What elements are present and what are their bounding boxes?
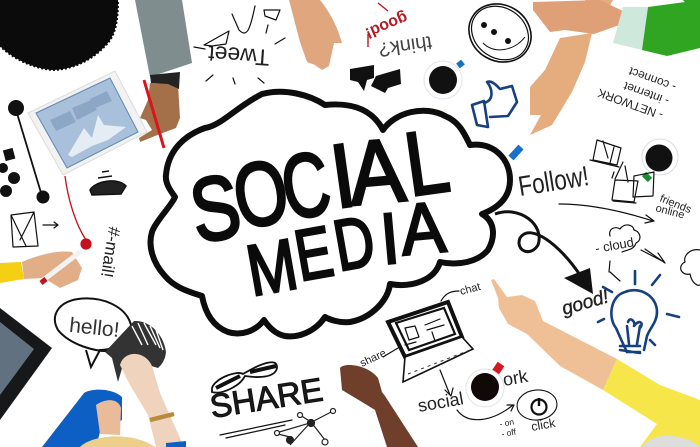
blue marker [511, 137, 527, 158]
friends online label: online [654, 202, 686, 221]
power click doodle: - on [499, 417, 515, 429]
share heading with glasses: SHARE [207, 371, 325, 425]
heading: MEDIA: D [328, 200, 381, 287]
good label: good! [560, 286, 612, 320]
heading: SOCIAL: C [274, 132, 337, 239]
hello speech bubble: hello! [68, 314, 121, 342]
afro hair [0, 0, 118, 70]
social work label: ork [501, 366, 530, 390]
heading: MEDIA: M [241, 223, 303, 311]
heading: SOCIAL: L [399, 109, 455, 215]
wifi doodle [90, 171, 126, 195]
yellow sleeve and hand with marker [0, 251, 82, 288]
friends network frames [590, 140, 654, 203]
heading: MEDIA: A [397, 186, 448, 271]
heading: SOCIAL: S [183, 155, 248, 263]
hello speech bubble [55, 298, 131, 367]
heading: SOCIAL: I [325, 125, 361, 228]
dark hand and arm [340, 365, 418, 447]
heading: SOCIAL: A [345, 120, 409, 225]
black line with dots [8, 100, 50, 204]
coffee cup right [642, 139, 678, 180]
dark tablet [0, 308, 52, 420]
thin arrow to friends [559, 204, 654, 223]
cloud label and doodle [594, 225, 700, 285]
blue shirt person with bracelet [42, 354, 186, 447]
friends online label: friends [658, 193, 693, 216]
smiley scribble [458, 0, 542, 73]
red line with dot [65, 176, 92, 250]
person in grey sleeve with red pen [135, 0, 192, 148]
red good and think doodle: think? [377, 31, 433, 60]
network connect text: - internet [621, 79, 671, 108]
heading: SOCIAL: O [226, 140, 296, 248]
coffee cup bottom [466, 364, 504, 407]
coffee cup top [424, 61, 463, 99]
chat and share labels [358, 281, 482, 370]
red good and think doodle: good! [363, 8, 410, 41]
arms and pointing hand at top right [530, 0, 700, 135]
black app blobs [0, 148, 20, 197]
cloud outline [151, 92, 510, 336]
power click doodle: - off [501, 426, 517, 439]
follow label: Follow! [516, 161, 591, 203]
envelope doodle [11, 212, 58, 247]
curly arrow from cloud [495, 212, 593, 294]
pointing arm with yellow sleeve [491, 279, 700, 447]
heading: MEDIA: E [289, 210, 339, 297]
chat and share labels: share [358, 347, 388, 370]
heading: MEDIA: I [377, 198, 402, 280]
heading: MEDIA [241, 186, 448, 311]
hatched speech bubble [105, 321, 166, 382]
black chat bubbles [350, 65, 401, 93]
cloud label and doodle: - cloud [594, 234, 635, 256]
icon: lightbulb [598, 271, 679, 353]
chat and share labels: chat [459, 281, 482, 298]
network connect text: - NETWORK [596, 86, 665, 122]
tweet doodle: Tweet [207, 41, 270, 71]
network diagram [274, 408, 336, 445]
icon: thumbs up [472, 82, 517, 127]
social work label [416, 366, 530, 416]
tweet doodle [194, 6, 285, 84]
laptop doodle [388, 302, 473, 382]
network connect text [596, 64, 678, 122]
power click doodle [457, 388, 558, 439]
social work label: social [416, 388, 465, 416]
network connect text: - connect [626, 64, 678, 94]
heading: SOCIAL [183, 109, 455, 263]
e-mail vertical label: #-mail! [97, 225, 124, 279]
top hand [289, 0, 342, 70]
tablet with world map [28, 71, 147, 175]
power click doodle: click [530, 416, 557, 434]
red good and think doodle [363, 3, 433, 60]
arrow from laptop [440, 370, 453, 396]
